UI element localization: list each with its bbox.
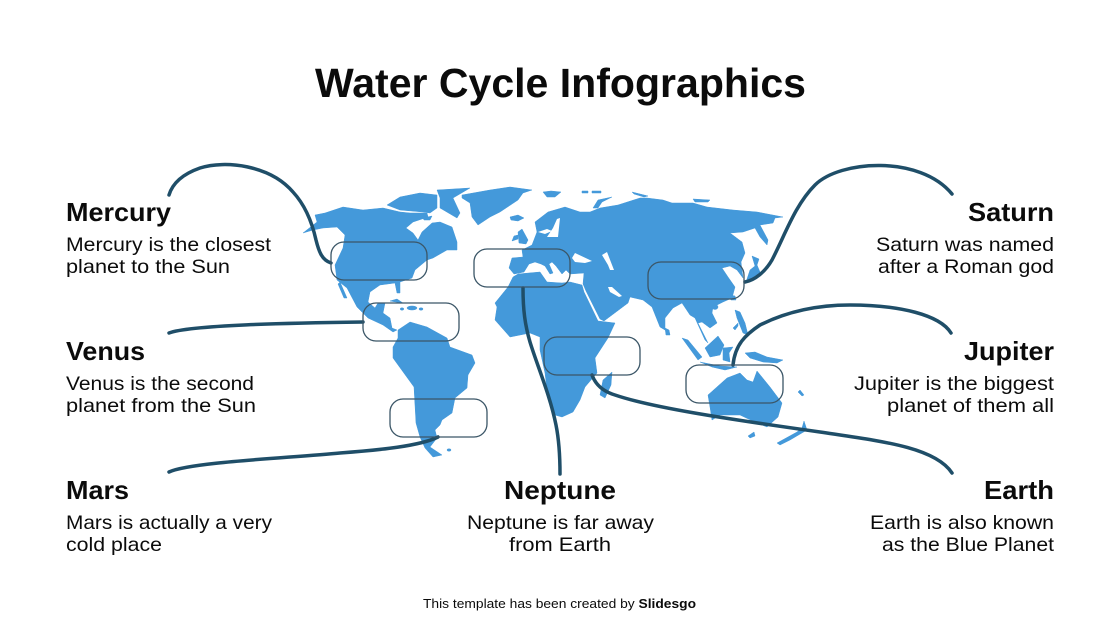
callout box: Mars [390,399,487,437]
text block: Neptune [467,475,654,556]
text block: Mars [66,475,272,556]
text block: Jupiter: planet of them all [887,395,1054,417]
text block: Jupiter [854,336,1055,417]
connector: Neptune [523,288,560,474]
text block: Saturn [876,197,1054,278]
world map [303,187,807,457]
text block: Venus [66,336,256,417]
text block: Saturn: after a Roman god [878,256,1054,278]
connector: Earth [592,375,952,473]
callout box: Venus [363,303,459,341]
text block: Neptune: from Earth [509,534,611,556]
text block: Saturn: Saturn was named [876,234,1054,256]
callout box: Saturn [648,262,744,299]
callout box: Earth [544,337,640,375]
text block: Saturn: Saturn [968,197,1054,227]
text block: Jupiter: Jupiter [964,336,1054,366]
title: Water Cycle Infographics [315,60,806,106]
callout box: Jupiter [686,365,783,403]
connector: Jupiter [733,305,951,365]
connector: Venus [169,322,363,333]
text block: Jupiter: Jupiter is the biggest [854,373,1055,395]
text block: Venus: Venus is the second [66,373,254,395]
text block: Neptune: Neptune [504,475,616,505]
callout box: Neptune [474,249,570,287]
text block: Mercury: Mercury is the closest [66,234,272,256]
text block: Mercury: Mercury [66,197,172,227]
text block: Venus: planet from the Sun [66,395,256,417]
footer credit: This template has been created by Slidesgo [423,597,696,611]
callout box: Mercury [331,242,427,280]
text block: Earth [870,475,1055,556]
text block: Venus: Venus [66,336,145,366]
connector: Mercury [169,165,331,263]
text block: Earth: as the Blue Planet [882,534,1055,556]
text block: Mars: cold place [66,534,162,556]
text block: Mars: Mars [66,475,129,505]
connector: Mars [169,437,438,472]
text block: Earth: Earth [984,475,1054,505]
text block: Mercury [66,197,272,278]
text block: Earth: Earth is also known [870,512,1054,534]
text block: Mercury: planet to the Sun [66,256,230,278]
connector: Saturn [745,165,952,282]
text block: Mars: Mars is actually a very [66,512,272,534]
text block: Neptune: Neptune is far away [467,512,654,534]
